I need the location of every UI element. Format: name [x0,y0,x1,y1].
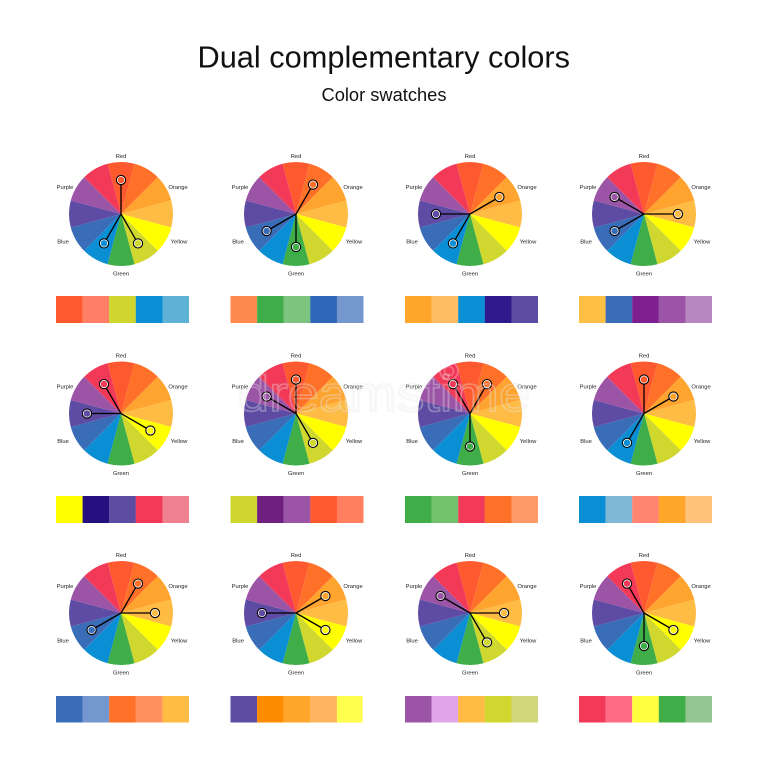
color wheel [592,162,696,266]
wheel labels: Green [462,670,478,676]
wheel labels: Yellow [694,439,711,445]
wheel labels: Orange [168,384,188,390]
wheel labels: Blue [232,638,244,644]
wheel labels: Green [113,272,129,278]
wheel labels: Purple [580,584,596,590]
color wheel [592,361,696,466]
wheel labels: Yellow [171,439,188,445]
wheel labels: Yellow [694,638,711,644]
panel: wheel 4 [580,154,711,278]
pointers and markers [436,591,509,647]
wheel labels [406,354,537,477]
swatch strip 6 [230,496,364,523]
wheel labels: Green [462,471,478,477]
wheel labels [580,154,711,278]
wheel labels [406,154,537,278]
wheel labels: Red [116,553,126,559]
wheel labels [232,553,363,676]
wheel labels: Orange [517,384,537,390]
pointers and markers [448,380,492,451]
swatch strip 11 [405,696,538,722]
pointers and markers [99,175,143,248]
watermark: dreamstime [238,366,530,422]
swatch strip 3 [405,296,538,323]
panel: wheel 11 [406,553,537,676]
wheel labels: Blue [406,240,418,246]
wheel labels: Red [639,154,649,160]
wheel labels [232,354,363,477]
panel: wheel 12 [580,553,711,676]
wheel labels: Blue [232,439,244,445]
wheel labels: Blue [580,240,592,246]
wheel labels: Red [116,154,126,160]
wheel labels: Green [462,272,478,278]
swatch strip 10 [230,696,362,722]
color wheel [592,561,696,665]
wheel labels: Orange [517,584,537,590]
wheel labels [57,354,188,477]
wheel labels [406,553,537,676]
wheel labels: Orange [691,185,711,191]
pointers and markers [622,579,678,651]
wheel labels: Orange [691,584,711,590]
panel: wheel 8 [580,354,711,477]
wheel labels: Red [465,553,475,559]
pointers and markers [82,380,155,435]
wheel labels: Purple [580,185,596,191]
color wheel [69,162,173,266]
wheel labels: Orange [691,384,711,390]
pointers and markers [87,579,160,635]
panel: wheel 10 [232,553,363,676]
wheel labels: Red [465,354,475,360]
color wheel [244,361,348,466]
pointers and markers [262,180,318,252]
swatch strip 9 [56,696,189,722]
color wheel [69,361,173,466]
title: Dual complementary colors [198,40,570,74]
wheel labels: Purple [232,185,248,191]
wheel labels: Orange [343,185,363,191]
swatch strip 12 [579,696,712,722]
swatch strip 4 [579,296,712,323]
wheel labels: Yellow [520,638,537,644]
wheel labels: Yellow [346,439,363,445]
wheel labels: Purple [57,185,73,191]
wheel labels: Yellow [520,240,537,246]
wheel labels: Green [288,670,304,676]
panel: wheel 6 [232,354,363,477]
wheel labels: Green [636,670,652,676]
panel: wheel 3 [406,154,537,278]
panel: wheel 2 [232,154,363,278]
panel: wheel 7 [406,354,537,477]
wheel labels: Yellow [171,240,188,246]
color wheel [418,162,522,266]
wheel labels: Orange [343,584,363,590]
swatch strip 7 [405,496,538,523]
wheel labels: Red [465,154,475,160]
pointers and markers [622,375,678,448]
wheel labels: Blue [580,638,592,644]
wheel labels: Blue [406,638,418,644]
wheel labels: Orange [168,584,188,590]
wheel labels: Purple [580,384,596,390]
wheel labels: Red [291,553,301,559]
wheel labels: Red [291,154,301,160]
color wheel [244,561,348,665]
wheel labels: Red [639,354,649,360]
wheel labels: Blue [406,439,418,445]
wheel labels: Red [291,354,301,360]
wheel labels: Purple [232,384,248,390]
wheel labels [57,154,188,278]
swatch strip 5 [56,496,189,523]
wheel labels: Orange [343,384,363,390]
wheel labels: Orange [168,185,188,191]
wheel labels [232,154,363,278]
watermark: dreamstime [238,366,530,422]
wheel labels: Purple [232,584,248,590]
wheel labels: Orange [517,185,537,191]
panel: wheel 5 [57,354,188,477]
wheel labels: Blue [580,439,592,445]
wheel labels: Purple [406,384,422,390]
wheel labels: Yellow [520,439,537,445]
wheel labels [580,553,711,676]
wheel labels: Yellow [346,240,363,246]
color wheel [418,561,522,665]
color wheel [69,561,173,665]
wheel labels [580,354,711,477]
wheel labels: Yellow [346,638,363,644]
wheel labels: Green [636,471,652,477]
wheel labels: Purple [406,185,422,191]
wheel labels: Green [636,272,652,278]
swatch strip 8 [579,496,712,523]
wheel labels: Green [113,670,129,676]
pointers and markers [257,591,330,635]
wheel labels: Yellow [694,240,711,246]
swatch strip 1 [56,296,189,323]
wheel labels: Green [288,471,304,477]
wheel labels: Purple [57,384,73,390]
wheel labels: Red [639,553,649,559]
wheel labels: Red [116,354,126,360]
color wheel [418,361,522,466]
wheel labels: Purple [57,584,73,590]
pointers and markers [610,192,683,236]
wheel labels: Blue [57,240,69,246]
panel: wheel 1 [57,154,188,278]
subtitle: Color swatches [322,84,446,105]
color wheel [244,162,348,266]
pointers and markers [431,192,504,248]
wheel labels [57,553,188,676]
wheel labels: Green [113,471,129,477]
panel: wheel 9 [57,553,188,676]
wheel labels: Yellow [171,638,188,644]
wheel labels: Purple [406,584,422,590]
swatch strip 2 [230,296,364,323]
wheel labels: Green [288,272,304,278]
wheel labels: Blue [57,638,69,644]
wheel labels: Blue [57,439,69,445]
wheel labels: Blue [232,240,244,246]
pointers and markers [262,375,318,448]
